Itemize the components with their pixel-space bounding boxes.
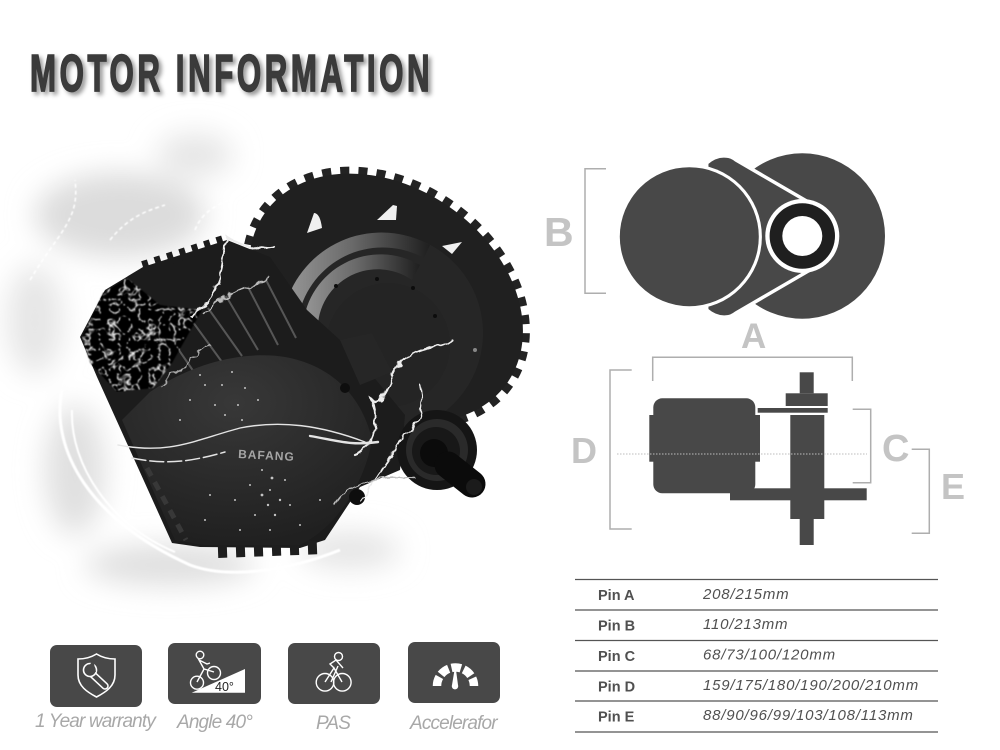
- row: Pin C: [598, 646, 836, 665]
- motor illustration: [30, 118, 575, 572]
- bracket A: [653, 357, 852, 381]
- row: Pin D: [598, 677, 919, 696]
- side view diagram: [649, 372, 867, 545]
- icon: angle 40: [168, 643, 261, 704]
- row: Pin A: [598, 586, 789, 604]
- chainring windows: [307, 205, 462, 254]
- water splash ribbons: [160, 235, 452, 505]
- motor-side disc with rims: [283, 233, 483, 433]
- motor housing: [80, 240, 405, 548]
- label B: B: [544, 209, 574, 255]
- left housing strip: [147, 468, 186, 540]
- top view diagram: [617, 153, 885, 319]
- crank arm: [707, 156, 810, 317]
- bracket E: [912, 449, 929, 533]
- chainring sprocket: [197, 118, 575, 478]
- brand logo: BAFANG: [238, 447, 295, 464]
- bracket C: [853, 409, 871, 483]
- title: MOTOR INFORMATION: [30, 45, 433, 103]
- row: Pin B: Pin B: [598, 618, 635, 634]
- crank bolt assembly: [340, 383, 482, 505]
- row: Pin C: Pin C: [598, 649, 636, 665]
- row: Pin D: Pin D: [598, 680, 635, 696]
- label D: D: [571, 430, 597, 471]
- icon: PAS cyclist: [288, 643, 380, 704]
- label A: A: [741, 317, 766, 356]
- label E: E: [941, 466, 965, 507]
- spec table: [575, 580, 938, 732]
- bearing: [765, 199, 839, 273]
- housing bottom teeth: [218, 547, 325, 551]
- splash texture: [82, 278, 202, 392]
- row: Pin E: 88/90/96/99/103/108/113mm: [703, 707, 914, 724]
- row: Pin E: [598, 707, 914, 726]
- row: Pin B: 110/213mm: [703, 616, 788, 633]
- water droplets: [179, 371, 321, 531]
- bracket D: [610, 370, 632, 529]
- row: Pin B: [598, 616, 788, 634]
- cooling fins: [172, 280, 296, 375]
- caption: accelerator: Accelerafor: [409, 713, 498, 734]
- row: Pin A: Pin A: [598, 588, 635, 604]
- row: Pin E: Pin E: [598, 710, 635, 726]
- icon: warranty shield: [50, 645, 142, 707]
- row: Pin C: 68/73/100/120mm: [703, 646, 836, 664]
- water haze background: [7, 133, 400, 585]
- side plate: [340, 333, 392, 385]
- white water arc and droplet trails: [30, 180, 340, 572]
- row: Pin A: 208/215mm: [702, 586, 789, 603]
- rear cover circle: [720, 153, 885, 319]
- caption: warranty: 1 Year warranty: [35, 711, 157, 732]
- icon: accelerator gauge: [408, 642, 500, 703]
- row: Pin D: 159/175/180/190/200/210mm: [703, 677, 919, 694]
- water stream across motor: [118, 424, 378, 462]
- motor circle: [617, 164, 762, 309]
- icon: angle 40: 40°: [215, 680, 234, 694]
- label C: C: [882, 428, 909, 470]
- motor cover: [122, 355, 372, 545]
- bracket B: [585, 169, 606, 293]
- housing top teeth: [143, 240, 227, 267]
- caption: angle: Angle 40°: [176, 712, 253, 733]
- caption: PAS: PAS: [316, 713, 351, 734]
